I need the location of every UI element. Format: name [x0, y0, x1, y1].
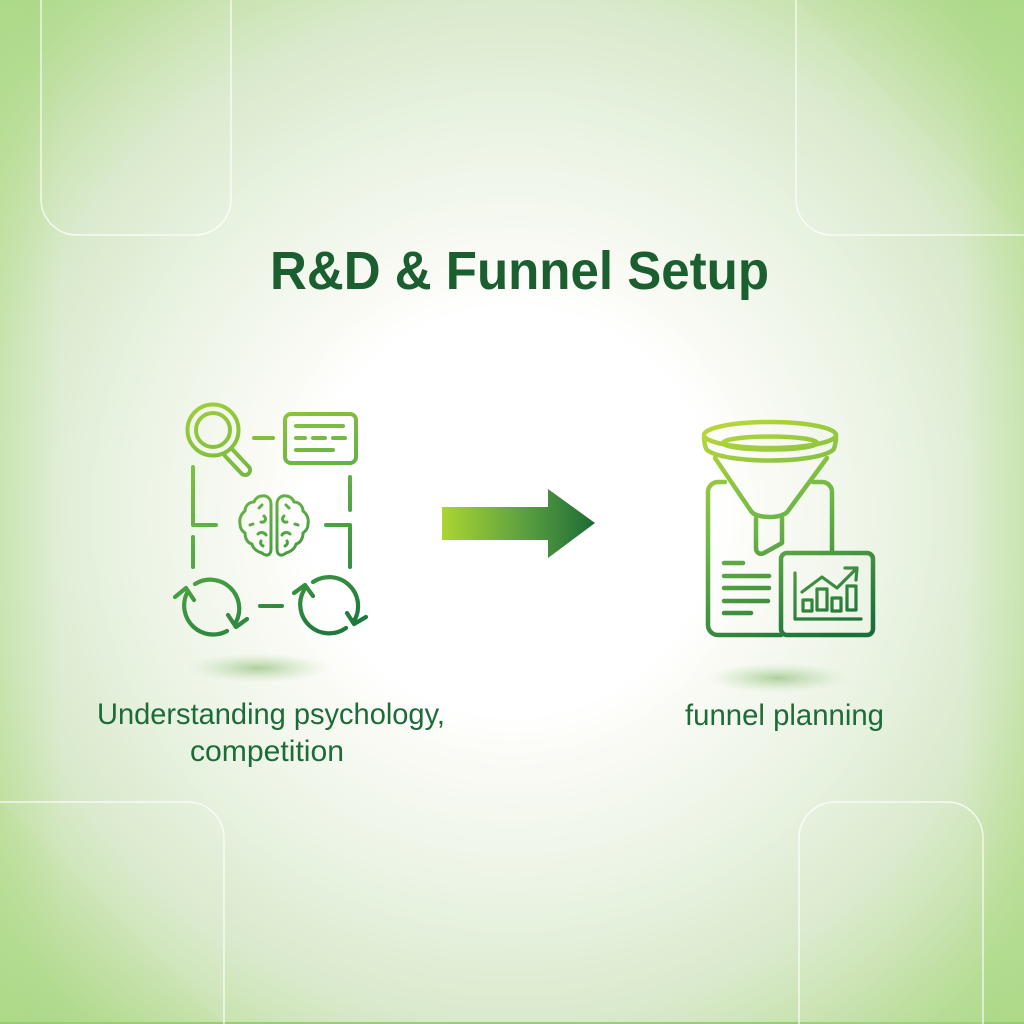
text: left caption: Understanding psychology,	[97, 698, 445, 731]
shadow under left icon	[186, 653, 330, 683]
panel: top-left corner card	[41, 0, 231, 235]
panel: bottom-right corner card	[799, 802, 983, 1024]
connectors between diagram nodes	[193, 438, 350, 606]
title: R&D & Funnel Setup	[270, 241, 769, 301]
icon: magnifying glass	[188, 404, 250, 475]
icon: research and psychology diagram	[175, 404, 366, 635]
icon: brain	[240, 496, 308, 555]
document outline	[708, 482, 832, 635]
text: left caption	[97, 698, 445, 768]
panel: bottom-left corner card	[0, 802, 224, 1024]
panel: top-right corner card	[796, 0, 1024, 235]
text: left caption: competition	[190, 735, 344, 768]
shadow under right icon	[706, 663, 850, 693]
icon: funnel with document and chart	[704, 422, 873, 635]
icon: right cycle arrows	[294, 577, 366, 633]
chart card	[781, 553, 873, 635]
text: right caption: funnel planning	[685, 699, 884, 732]
funnel	[704, 422, 836, 554]
icon: left cycle arrows	[175, 580, 247, 635]
arrow	[442, 489, 595, 558]
bar chart with trend arrow	[795, 568, 861, 619]
icon: text card	[285, 414, 356, 463]
document text lines	[724, 563, 769, 613]
